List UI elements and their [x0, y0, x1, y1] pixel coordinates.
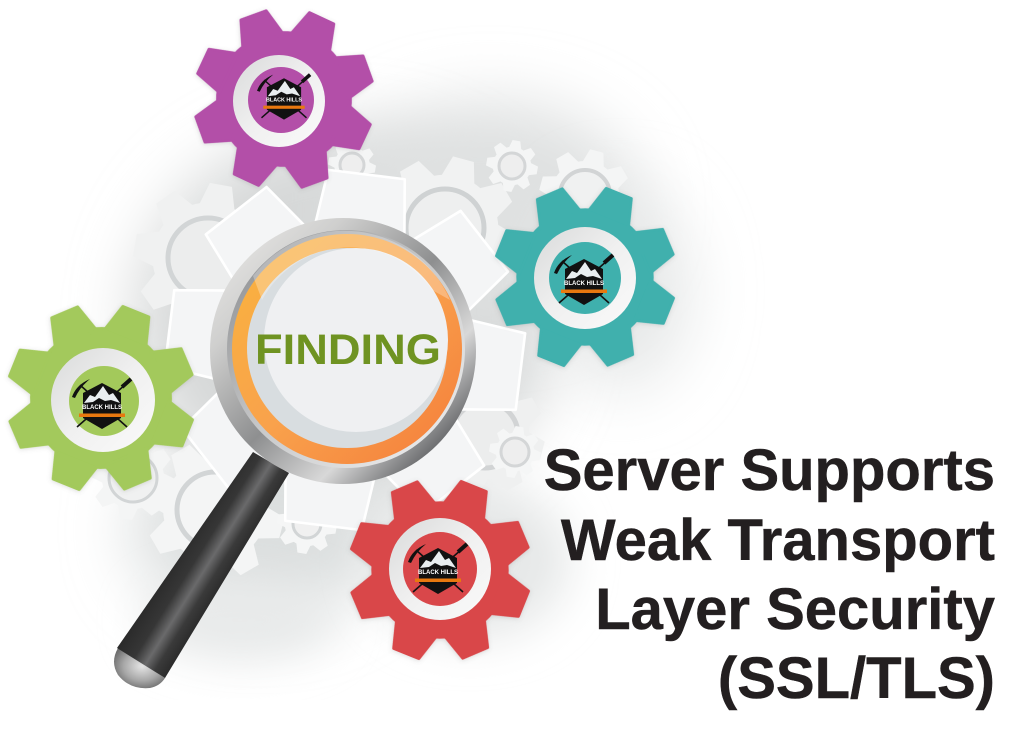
gear: red	[323, 453, 557, 687]
background small gears	[85, 136, 641, 595]
logo: Black Hills badge, red gear: BLACK HILLS	[418, 570, 458, 576]
lens rim	[210, 218, 476, 484]
logo: Black Hills badge, purple gear: BLACK HILLS	[266, 98, 302, 104]
magnifying glass	[114, 218, 476, 688]
title: Layer Security	[595, 577, 995, 642]
gear: green	[0, 277, 222, 519]
logo: Black Hills badge, purple gear	[257, 75, 310, 120]
title: (SSL/TLS)	[718, 646, 995, 711]
title: Server Supports	[544, 438, 995, 503]
logo: Black Hills badge, green gear	[72, 379, 131, 429]
large white background gear	[148, 153, 542, 547]
lens glass	[247, 231, 450, 448]
logo: Black Hills badge, red gear	[408, 544, 467, 594]
logo: Black Hills badge, green gear: BLACK HILLS	[82, 405, 122, 411]
gear: purple	[166, 0, 402, 217]
logo: Black Hills badge, teal gear	[554, 255, 613, 305]
title: Weak Transport	[561, 508, 995, 573]
handle	[114, 452, 289, 688]
title	[544, 438, 995, 711]
lens label: FINDING: FINDING	[255, 326, 441, 374]
gear: teal	[468, 160, 702, 394]
logo: Black Hills badge, teal gear: BLACK HILLS	[564, 281, 604, 287]
